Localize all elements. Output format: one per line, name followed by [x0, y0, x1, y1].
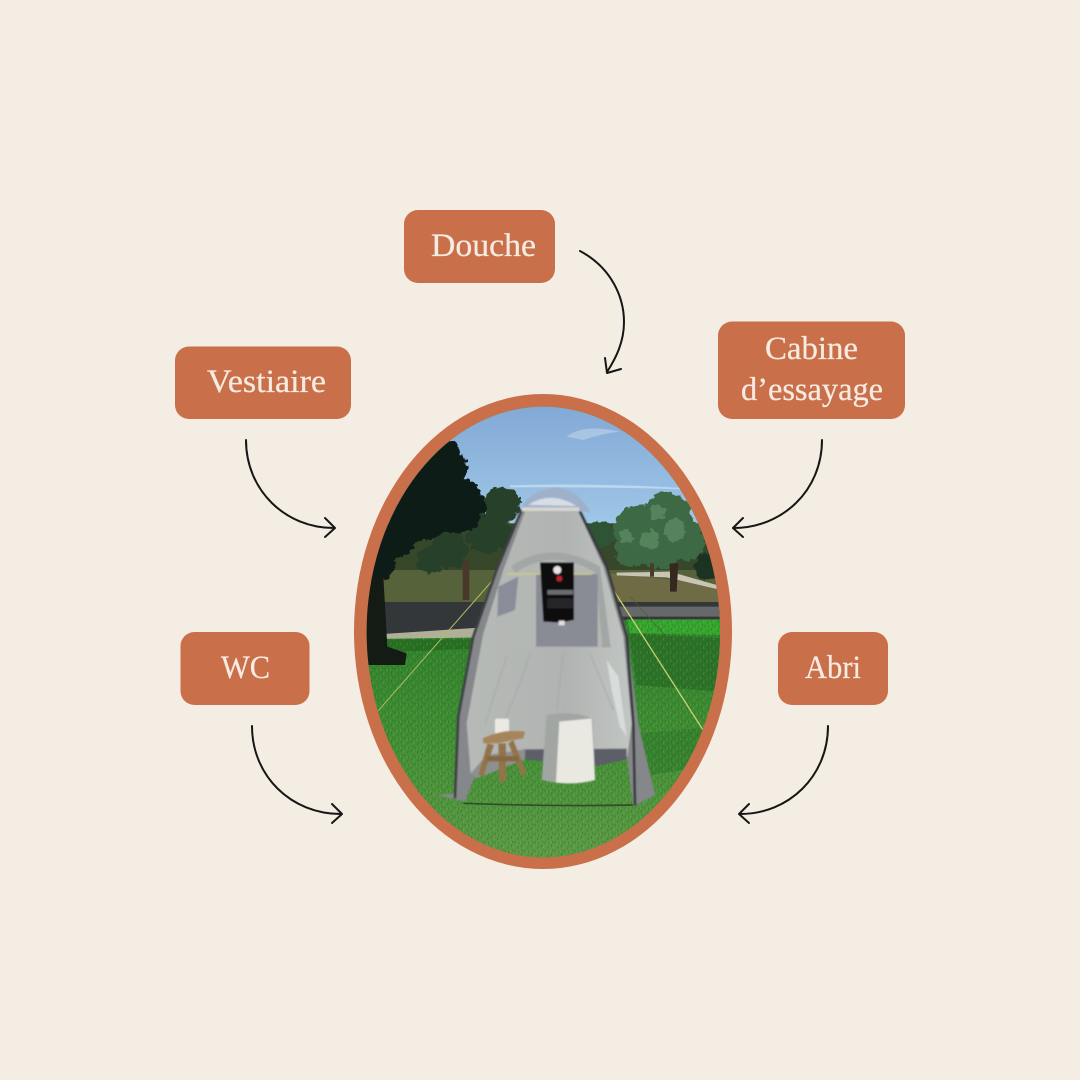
label: Abri: Abri	[805, 650, 861, 686]
fabric folds	[590, 655, 614, 710]
arrow: Abri to photo	[739, 726, 828, 823]
oval frame	[354, 394, 732, 869]
arrow: Douche to photo	[580, 251, 624, 373]
guy lines	[378, 580, 493, 711]
photo: tent in a park	[366, 406, 720, 858]
label: Cabine d'essayage	[718, 322, 905, 419]
tent edges	[455, 510, 522, 798]
tent shadow line	[463, 803, 637, 806]
arrow: Vestiaire to photo	[246, 440, 335, 537]
upper arch panel	[511, 552, 611, 647]
shower bag	[540, 562, 574, 623]
panel: central photo oval	[350, 390, 740, 880]
label: Vestiaire	[175, 346, 351, 419]
trees	[358, 440, 722, 582]
lawn	[366, 620, 720, 858]
label: Cabine d'essayage: Cabine	[765, 331, 858, 367]
label: Cabine d'essayage: d’essayage	[741, 372, 883, 408]
label: Vestiaire: Vestiaire	[207, 364, 326, 400]
arrow: Cabine to photo	[733, 440, 822, 537]
toilet	[542, 713, 595, 783]
label: Abri	[778, 632, 888, 705]
label: WC	[180, 632, 310, 705]
label: Douche	[404, 210, 555, 283]
label: Douche: Douche	[431, 228, 536, 264]
tent dome	[522, 487, 590, 513]
label: WC: WC	[221, 650, 270, 686]
tent body	[437, 487, 655, 807]
stool	[483, 731, 525, 743]
toilet roll	[495, 719, 509, 735]
arrow: WC to photo	[252, 726, 342, 823]
